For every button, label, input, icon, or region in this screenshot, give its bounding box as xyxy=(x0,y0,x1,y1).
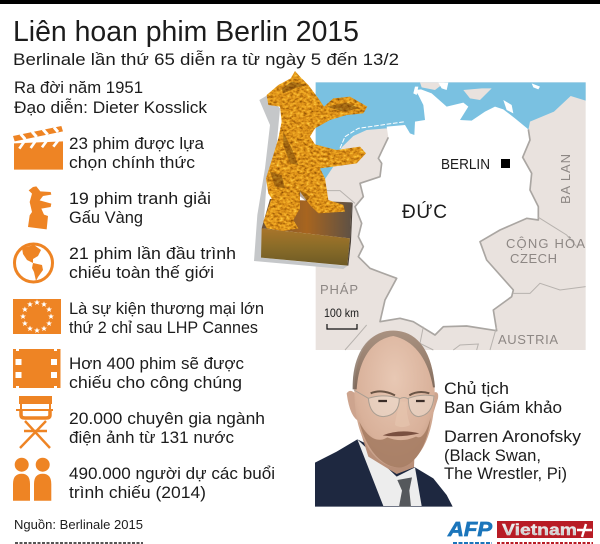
statue shadow xyxy=(254,96,347,269)
text: selected films: chọn chính thức xyxy=(69,153,196,172)
intro text xyxy=(14,78,207,117)
text: public screenings: Hơn 400 phim sẽ được xyxy=(69,354,244,373)
logo: Vietnam+ xyxy=(497,521,593,539)
text: role: Ban Giám khảo xyxy=(444,398,562,417)
France label: PHÁP xyxy=(320,282,358,297)
top black bar xyxy=(0,0,600,4)
Germany xyxy=(355,89,538,335)
map of Germany xyxy=(316,82,586,350)
scale bar: 100 km xyxy=(324,306,359,320)
Czech label: CZECH xyxy=(510,251,557,266)
shirt xyxy=(357,439,422,506)
text: golden bear competition: 19 phim tranh giải xyxy=(69,189,211,208)
list item: selected films xyxy=(13,126,205,172)
subtitle: Berlinale lần thứ 65 diễn ra từ ngày 5 đến 13/2 xyxy=(13,50,399,69)
danish land and islands xyxy=(420,82,492,100)
eyebrows xyxy=(371,391,429,395)
Germany land border xyxy=(355,129,538,335)
Czech label: CỘNG HÒA xyxy=(506,236,585,251)
text: golden bear competition xyxy=(69,189,211,227)
Berlin marker xyxy=(501,159,510,168)
list item: market xyxy=(13,299,264,337)
icon: clapperboard xyxy=(13,126,63,170)
source: Nguồn: Berlinale 2015 xyxy=(14,517,143,532)
ears xyxy=(347,391,438,422)
eyes xyxy=(378,397,425,404)
text: role xyxy=(444,379,562,417)
text: world premieres: chiếu toàn thế giới xyxy=(69,263,214,282)
text: name and films: (Black Swan, xyxy=(444,446,541,465)
portrait of jury president xyxy=(315,331,453,507)
text: public screenings: chiếu cho công chúng xyxy=(69,373,242,392)
text: selected films xyxy=(69,134,205,172)
text: attendance xyxy=(69,464,275,502)
text: role: Chủ tịch xyxy=(444,379,509,398)
moustache and mouth xyxy=(383,431,419,436)
map labels xyxy=(320,154,585,347)
text: market: Là sự kiện thương mại lớn xyxy=(69,299,264,318)
gold bear statue xyxy=(254,71,367,269)
stubble hair xyxy=(353,331,435,389)
text: golden bear competition: Gấu Vàng xyxy=(69,208,143,227)
icon: film strip xyxy=(13,349,60,388)
text: selected films: 23 phim được lựa xyxy=(69,134,205,153)
nose xyxy=(395,402,410,427)
Berlin label: BERLIN xyxy=(441,157,490,173)
tie xyxy=(397,477,412,507)
text: attendance: 490.000 người dự các buổi xyxy=(69,464,275,483)
Poland label: BA LAN xyxy=(558,154,573,204)
Czech label xyxy=(506,236,585,266)
neck xyxy=(360,430,415,474)
neighbouring borders xyxy=(327,191,586,350)
head xyxy=(354,331,435,468)
text: professionals xyxy=(69,409,265,447)
text: world premieres: 21 phim lần đầu trình xyxy=(69,244,236,263)
list item: professionals xyxy=(16,397,265,448)
statue base xyxy=(261,199,353,266)
text: public screenings xyxy=(69,354,244,392)
text: name and films xyxy=(444,427,582,483)
list item: public screenings xyxy=(13,349,244,392)
text: professionals: 20.000 chuyên gia ngành xyxy=(69,409,265,428)
text: attendance: trình chiếu (2014) xyxy=(69,483,206,502)
jury text xyxy=(444,379,582,483)
glasses xyxy=(354,390,434,417)
icon: bear silhouette xyxy=(28,186,51,229)
scale bar xyxy=(324,306,359,329)
logo: Vietnam+: Vietnam xyxy=(502,522,577,539)
suit xyxy=(315,439,453,507)
cropped bottom line xyxy=(15,542,593,544)
small white islands xyxy=(413,83,540,113)
Austria label: AUSTRIA xyxy=(498,332,558,347)
text: world premieres xyxy=(69,244,236,282)
icon: two people xyxy=(13,458,51,501)
list item: world premieres xyxy=(14,244,236,282)
title: Liên hoan phim Berlin 2015 xyxy=(13,16,359,48)
text: name and films: The Wrestler, Pi) xyxy=(444,464,567,483)
bear body xyxy=(263,71,367,231)
bear shading xyxy=(270,82,360,202)
intro text: Đạo diễn: Dieter Kosslick xyxy=(14,98,207,117)
text: name and films: Darren Aronofsky xyxy=(444,427,582,446)
logo: AFP: AFP xyxy=(447,519,493,541)
sea xyxy=(316,82,586,183)
Germany label: ĐỨC xyxy=(402,201,447,223)
text: market xyxy=(69,299,264,337)
icon: globe xyxy=(14,244,52,282)
list item: attendance xyxy=(13,458,275,502)
icon: stars flag xyxy=(13,299,61,334)
text: market: thứ 2 chỉ sau LHP Cannes xyxy=(69,318,258,337)
icon: director chair xyxy=(16,397,53,448)
list item: golden bear competition xyxy=(28,186,211,229)
beard xyxy=(359,417,431,467)
frisian islands xyxy=(340,122,405,148)
text: professionals: điện ảnh từ 131 nước xyxy=(69,428,234,447)
intro text: Ra đời năm 1951 xyxy=(14,78,143,97)
